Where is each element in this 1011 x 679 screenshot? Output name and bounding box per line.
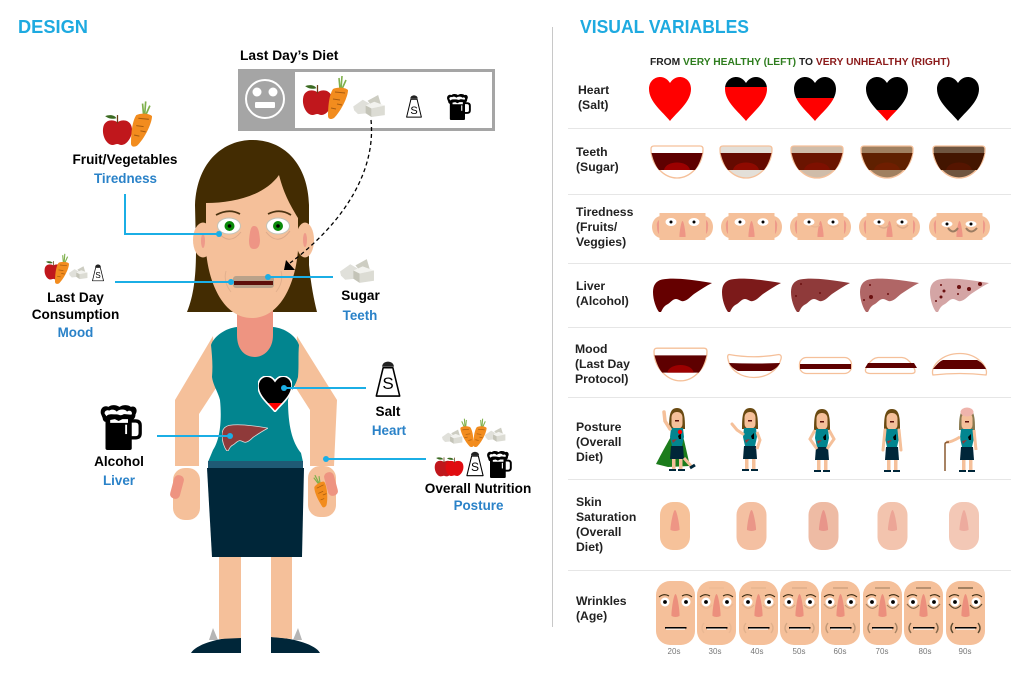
- face 20s: 20s: [668, 647, 680, 656]
- connector: heart: [281, 385, 366, 391]
- face 40s: [739, 581, 778, 656]
- row separators: [568, 128, 1011, 570]
- row label: (Alcohol): [576, 294, 629, 308]
- face 90s: [946, 581, 985, 656]
- face 70s: 70s: [876, 647, 888, 656]
- face 50s: 50s: [793, 647, 805, 656]
- teeth scale: [651, 146, 985, 178]
- row label: Tiredness: [576, 205, 634, 219]
- icon: salt: S: [471, 460, 479, 474]
- thumbs: [169, 471, 339, 500]
- eyebrows: [216, 211, 291, 215]
- icon: salt: S: [95, 271, 101, 280]
- posture figure: elderly with cane: [945, 408, 976, 472]
- mapped variable: Mood: [58, 325, 93, 340]
- eye: right: [266, 218, 290, 234]
- row label: Liver: [576, 279, 605, 293]
- face 80s: 80s: [919, 647, 931, 656]
- callout: sugar: [340, 259, 380, 323]
- posture figure: superhero: [656, 408, 695, 471]
- icon: sugar: [69, 266, 87, 279]
- divider between panels: [552, 27, 553, 627]
- skin scale: [660, 502, 979, 550]
- row label: (Fruits/: [576, 220, 618, 234]
- face 50s: [780, 581, 819, 656]
- row: skin saturation: [576, 495, 979, 554]
- neutral face icon: [238, 69, 295, 131]
- row label: (Sugar): [576, 160, 619, 174]
- callout: last day consumption: [32, 254, 119, 340]
- nose: [249, 226, 260, 249]
- carrot in hand: [306, 473, 336, 508]
- mapped variable: Tiredness: [94, 171, 157, 186]
- heart on shirt: [258, 376, 292, 412]
- row label: Saturation: [576, 510, 636, 524]
- shoe accents: [209, 628, 302, 640]
- row label: (Age): [576, 609, 607, 623]
- face 70s: [863, 581, 902, 656]
- label: Alcohol: [94, 454, 144, 469]
- face 30s: [697, 581, 736, 656]
- connector: tiredness to eye: [125, 194, 222, 237]
- dashed arrow from sugar to mouth: [284, 120, 372, 270]
- icon group: sugar and carrots: [442, 419, 505, 447]
- callout: alcohol: [94, 405, 144, 488]
- mapped variable: Liver: [103, 473, 136, 488]
- heading: design: DESIGN: [18, 17, 88, 37]
- mapped variable: Heart: [372, 423, 407, 438]
- panel: design: [32, 48, 531, 653]
- row label: Posture: [576, 420, 622, 434]
- connector: liver: [157, 433, 233, 439]
- icon: apple: [303, 85, 332, 115]
- callout: overall nutrition: [425, 419, 531, 513]
- icon: salt: [407, 95, 421, 117]
- legs: [219, 550, 292, 639]
- posture figure: arms down: [883, 409, 901, 472]
- label: Fruit/Vegetables: [72, 152, 178, 167]
- row label: Protocol): [575, 372, 628, 386]
- tiredness scale: [652, 213, 990, 240]
- row label: Heart: [578, 83, 609, 97]
- row label: Skin: [576, 495, 602, 509]
- label line 2: Consumption: [32, 307, 119, 322]
- face 90s: 90s: [959, 647, 971, 656]
- face 30s: 30s: [709, 647, 721, 656]
- panel: last day's diet box: [238, 69, 494, 131]
- icon: sugar: [353, 95, 385, 117]
- box frame: [240, 70, 494, 130]
- row: heart: [578, 77, 979, 121]
- heart scale: [649, 77, 979, 121]
- row label: (Overall: [576, 525, 621, 539]
- icon: salt: S: [382, 374, 394, 393]
- hair: [187, 140, 317, 312]
- connector: posture: [323, 456, 426, 462]
- face: [206, 175, 298, 318]
- label: last day's diet title: Last Day’s Diet: [240, 48, 339, 63]
- row: liver: [576, 279, 989, 312]
- shirt: [208, 327, 303, 462]
- icon: carrot: [328, 76, 348, 119]
- label: Last Day: [47, 290, 104, 305]
- liver on shirt: [222, 425, 268, 451]
- mapped variable: Posture: [454, 498, 503, 513]
- row: teeth: [576, 145, 985, 178]
- label: Sugar: [341, 288, 380, 303]
- eye: left: [218, 218, 240, 234]
- icon: beer: [101, 405, 140, 450]
- face 60s: 60s: [834, 647, 846, 656]
- icon: beer: [487, 451, 511, 478]
- row: wrinkles: [576, 581, 985, 656]
- label: Overall Nutrition: [425, 481, 531, 496]
- row label: (Overall: [576, 435, 621, 449]
- row label: Wrinkles: [576, 594, 627, 608]
- icon: beer: [447, 94, 470, 120]
- row: posture: [576, 408, 976, 472]
- mapped variable: Teeth: [343, 308, 377, 323]
- heading: visual variables: VISUAL VARIABLES: [580, 17, 749, 37]
- row label: (Last Day: [575, 357, 630, 371]
- row label: Diet): [576, 540, 603, 554]
- skirt: [207, 468, 304, 557]
- icon: carrot: [55, 254, 69, 284]
- waistband: [208, 461, 303, 469]
- face 20s: [656, 581, 695, 656]
- row label: (Salt): [578, 98, 608, 112]
- character figure: [169, 140, 339, 653]
- neck: [237, 310, 273, 357]
- arms and hands: [173, 336, 337, 520]
- icon group: apples: [435, 457, 463, 476]
- row label: Diet): [576, 450, 603, 464]
- label: Salt: [376, 404, 401, 419]
- connector: mood to mouth: [115, 279, 234, 285]
- icon: sugar: [340, 259, 374, 283]
- panel: visual variables: [568, 57, 1011, 656]
- face 80s: [904, 581, 943, 656]
- row label: Mood: [575, 342, 608, 356]
- face 60s: [821, 581, 860, 656]
- callout: salt: [372, 362, 407, 438]
- row label: Teeth: [576, 145, 608, 159]
- posture figure: waving: [732, 408, 760, 471]
- mouth: [225, 271, 282, 292]
- icon: salt: S: [410, 105, 418, 117]
- callout: fruit and vegetables: [72, 101, 178, 186]
- row: tiredness: [576, 205, 990, 249]
- under-eye shading: [217, 231, 290, 239]
- posture figure: hands on hips: [810, 409, 834, 472]
- icon: apple: [45, 261, 62, 280]
- icon: carrot: [131, 101, 152, 147]
- ears: [193, 222, 314, 258]
- liver scale: [653, 279, 989, 312]
- legend heading: FROM VERY HEALTHY (LEFT) TO VERY UNHEALTHY (RIGHT): [650, 57, 950, 68]
- shoes: [191, 637, 320, 653]
- face 40s: 40s: [751, 647, 763, 656]
- mood scale: [654, 348, 986, 381]
- connector: teeth to mouth: [265, 274, 333, 280]
- row: mood: [575, 342, 986, 386]
- icon: apple: [103, 115, 132, 145]
- row label: Veggies): [576, 235, 626, 249]
